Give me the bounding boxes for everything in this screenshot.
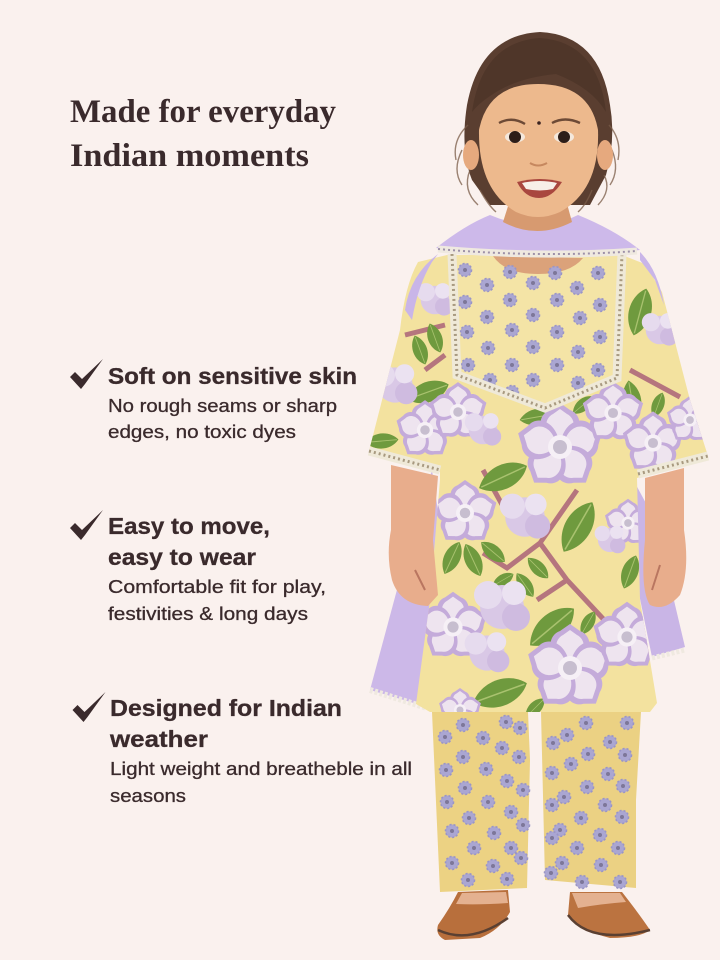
benefit: designed for Indian weather [72, 692, 412, 806]
ears [463, 140, 479, 170]
face [479, 84, 598, 217]
neck [503, 200, 572, 231]
benefit: soft on sensitive skin: edges, no toxic dyes [108, 421, 296, 442]
benefit: easy to move [70, 510, 326, 624]
leaves [479, 462, 527, 492]
benefit: easy to move: festivities & long days [108, 603, 308, 624]
benefit: designed for Indian weather: Designed for Indian [110, 695, 342, 721]
illustration: smiling child in yellow kurta set [365, 32, 716, 940]
lace trim [369, 254, 708, 474]
yoke [450, 255, 622, 408]
hair back [464, 32, 612, 205]
benefit: soft on sensitive skin: Soft on sensitive skin [108, 363, 357, 389]
heading: Indian moments [70, 138, 309, 174]
benefit: easy to move: easy to wear [108, 544, 256, 570]
flowers [518, 405, 600, 484]
icon: check mark [70, 510, 103, 540]
nose [530, 163, 547, 166]
benefit: designed for Indian weather: weather [109, 726, 208, 752]
heading [70, 94, 336, 174]
curls [455, 125, 619, 212]
benefit: designed for Indian weather: Light weight and breatheble in all [110, 758, 412, 779]
icon: check mark [70, 359, 103, 389]
bindi [537, 121, 541, 125]
head [455, 32, 619, 231]
heading: Made for everyday [70, 94, 336, 130]
smile [517, 179, 562, 198]
kurta with floral print [365, 254, 716, 734]
pants [432, 712, 641, 892]
benefit: soft on sensitive skin [70, 359, 357, 442]
benefit: easy to move: Comfortable fit for play, [108, 576, 326, 597]
brows [499, 120, 580, 124]
lower dupatta drape [370, 470, 685, 708]
yoke motifs [458, 264, 606, 398]
benefit: easy to move: Easy to move, [108, 513, 270, 539]
hair top [472, 38, 606, 112]
benefit: designed for Indian weather: seasons [110, 785, 186, 806]
upper dupatta [405, 215, 664, 320]
benefit: soft on sensitive skin: No rough seams or sharp [108, 395, 337, 416]
arms and hands [389, 465, 686, 607]
eyes [505, 132, 525, 142]
neckline [493, 256, 583, 274]
shoes [437, 890, 650, 940]
branches [405, 325, 680, 623]
icon: check mark [72, 692, 106, 722]
